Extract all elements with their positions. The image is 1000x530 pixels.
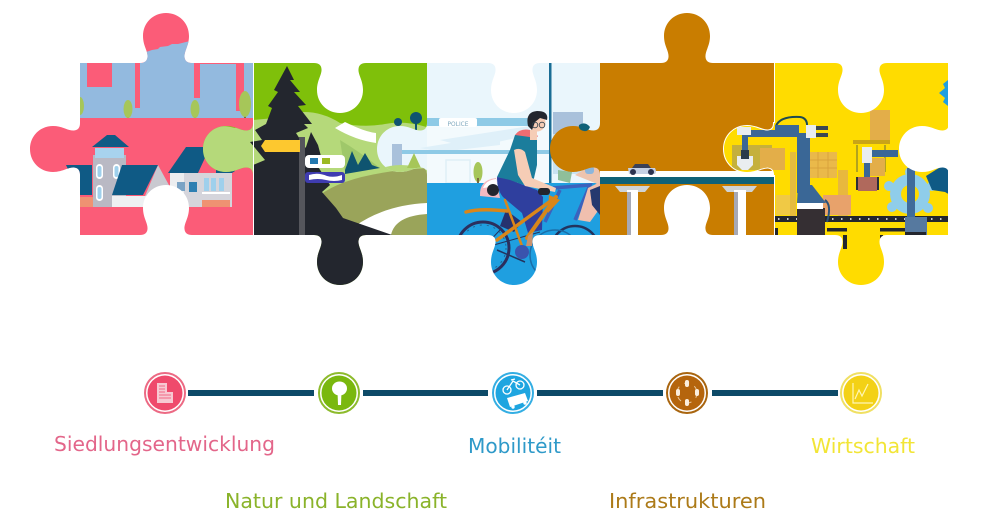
- main cyclist: [457, 111, 560, 274]
- boxes and crates: [732, 110, 890, 216]
- sky with building silhouettes: [80, 41, 253, 118]
- police car: [480, 178, 500, 198]
- notch bottom: [661, 185, 713, 237]
- notch top: [488, 61, 540, 113]
- robot arm right: [857, 147, 927, 235]
- label: Wirtschaft: Wirtschaft: [811, 434, 915, 458]
- POLICE sign: [439, 118, 477, 128]
- notch top: [835, 61, 887, 113]
- signpost: [261, 137, 345, 235]
- panel: puzzle piece Mobilitéit: [370, 60, 605, 293]
- second cyclist: [530, 165, 600, 280]
- bike frame: [466, 197, 556, 246]
- bike wheels: [457, 222, 540, 274]
- label: Infrastrukturen: Infrastrukturen: [609, 489, 766, 513]
- panel: puzzle piece Natur und Landschaft: [200, 60, 430, 290]
- houses: [66, 135, 235, 207]
- car: [628, 164, 656, 175]
- timeline connectors: [188, 390, 838, 396]
- icon: buildings: [145, 373, 185, 413]
- street scene background: [386, 63, 600, 285]
- hills and road: [200, 112, 430, 240]
- label: Siedlungsentwicklung: Siedlungsentwicklung: [54, 432, 275, 456]
- bridge: [600, 171, 775, 236]
- notch right: [899, 123, 951, 175]
- notch top: [314, 61, 366, 113]
- conveyor: [775, 216, 948, 249]
- label: Mobilitéit: Mobilitéit: [468, 434, 561, 458]
- icon: bicycle and bus: [493, 373, 533, 413]
- trees: [76, 91, 251, 118]
- label: Natur und Landschaft: Natur und Landschaft: [225, 489, 447, 513]
- icon: tree: [319, 373, 359, 413]
- POLICE sign: POLICE: [448, 120, 468, 128]
- person body: [515, 130, 538, 137]
- notch bottom: [140, 185, 192, 237]
- trees dark blue: [394, 112, 422, 130]
- dark forest: [250, 66, 392, 290]
- robot arm left: [737, 117, 829, 235]
- gear blue: [884, 80, 950, 214]
- panel: puzzle piece Infrastrukturen: [550, 13, 774, 235]
- icon: infrastructure nodes: [667, 373, 707, 413]
- panel: puzzle piece Siedlungsentwicklung: [30, 13, 253, 235]
- icon: line chart: [841, 373, 881, 413]
- panel: puzzle piece Wirtschaft: [720, 60, 952, 290]
